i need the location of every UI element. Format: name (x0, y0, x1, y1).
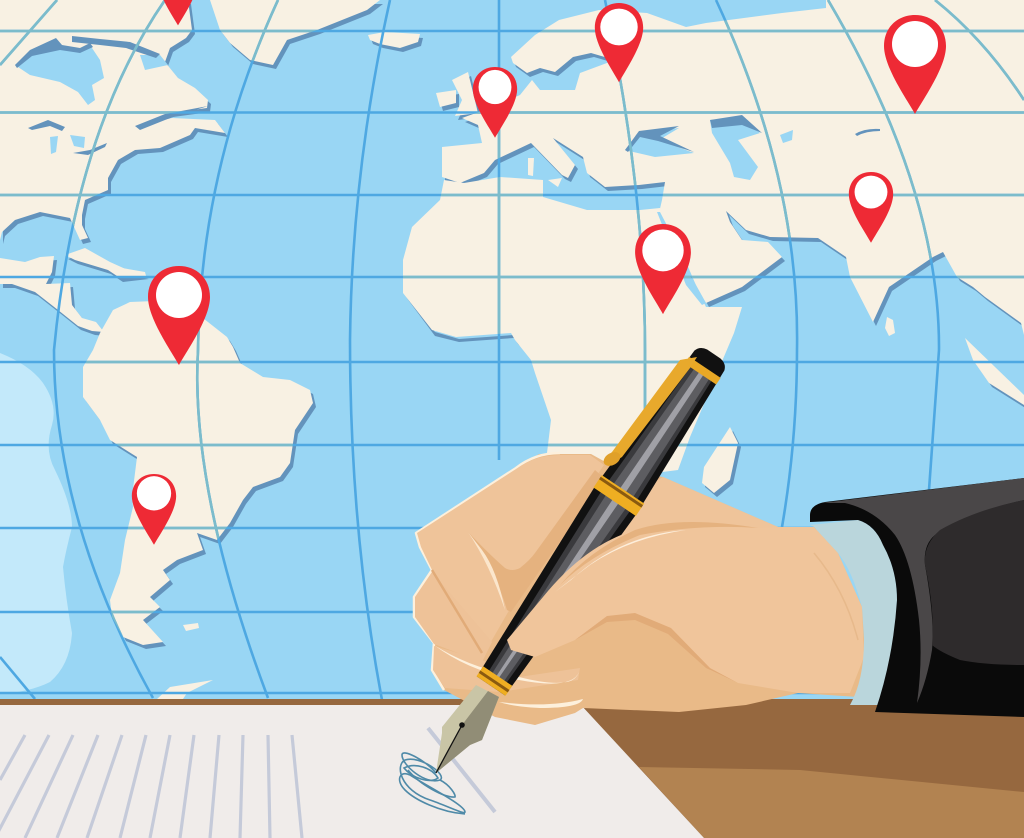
centre ring shade (599, 477, 643, 508)
Red Sea (657, 212, 706, 305)
Baffin strait shadow (72, 36, 160, 58)
pen clip (604, 357, 697, 466)
lower ring shade (479, 670, 509, 692)
desk (0, 699, 1024, 838)
nib body (436, 685, 499, 773)
signature line (428, 728, 495, 812)
Lake Erie (73, 143, 107, 155)
pin: Northern Europe (595, 3, 643, 82)
Cuba (65, 248, 146, 278)
Gulf of St Lawrence shadow (135, 106, 208, 130)
barrel base (470, 340, 735, 700)
map pins (132, 0, 946, 545)
Lake Michigan (50, 136, 58, 154)
pin: South America south (132, 474, 176, 545)
barrel mid band (486, 366, 712, 687)
hand silhouette (414, 454, 866, 725)
nib shading (436, 691, 499, 773)
Lake Baikal (855, 129, 880, 136)
finger crease shade (468, 470, 604, 612)
lower gold ring (476, 666, 512, 696)
Hispaniola (122, 268, 146, 276)
finger divider (432, 570, 482, 653)
pen nib (436, 685, 499, 773)
wrist fold (814, 553, 858, 640)
pin: East Africa (635, 224, 691, 314)
signature scribble (400, 753, 465, 814)
Africa (403, 177, 742, 480)
North America (0, 0, 225, 240)
third finger (433, 646, 580, 692)
Black Sea (625, 128, 694, 157)
pin: Western Europe (473, 67, 517, 138)
South America (83, 300, 313, 645)
Central America (0, 256, 104, 332)
light water zone (0, 353, 72, 694)
Greenland (210, 0, 380, 65)
pin: North America (159, 0, 197, 25)
finger crease highlight (468, 532, 505, 610)
Hudson Strait (140, 55, 168, 70)
back of hand (610, 477, 778, 545)
thumb and palm (507, 523, 864, 693)
thumb crease (560, 522, 758, 585)
shirt cuff (810, 520, 897, 705)
index finger (417, 455, 604, 653)
centre gold ring (593, 475, 644, 516)
clip ball (601, 449, 623, 469)
nib breather hole (459, 722, 465, 728)
top gold ring (685, 357, 721, 385)
palm shadow edge (575, 613, 738, 683)
Iceland (368, 32, 420, 48)
pin: Siberia (884, 15, 946, 114)
barrel dark grey band (481, 363, 716, 689)
cream rim light (414, 453, 560, 690)
pin: South America north (148, 266, 210, 365)
sleeve grey fold (822, 478, 1024, 703)
Caspian shadow (710, 115, 762, 133)
Sumatra and islands (965, 338, 1024, 405)
pen barrel (470, 340, 735, 700)
suit sleeve (810, 478, 1024, 717)
Falkland islands (183, 623, 199, 631)
barrel highlight (493, 371, 705, 682)
sleeve dark panel (925, 500, 1024, 665)
Antarctic peninsula (157, 680, 213, 699)
Black Sea shadow (625, 126, 694, 152)
inland seas (15, 40, 793, 305)
second finger (415, 572, 492, 662)
Sardinia (528, 158, 534, 176)
Madagascar (702, 427, 738, 493)
ruled text lines (0, 735, 302, 838)
paper sheet (0, 705, 704, 838)
desk edge and shadow (0, 699, 1024, 838)
Ireland (436, 90, 456, 107)
middle finger highlight (434, 645, 579, 684)
desk lit surface (639, 767, 1024, 838)
pin: India (849, 172, 893, 243)
Lake Huron (70, 135, 85, 148)
thumb highlight (555, 530, 686, 592)
Sicily (548, 178, 562, 187)
Lake Superior (28, 120, 65, 131)
Caspian Sea (710, 117, 760, 180)
Britain (452, 72, 478, 116)
ring finger highlight (499, 699, 583, 708)
Sri Lanka (885, 317, 895, 336)
paper (0, 705, 704, 838)
Aral Sea (780, 130, 793, 143)
fountain pen (436, 340, 735, 773)
sleeve black base (810, 478, 1024, 717)
coastal shadow strokes (15, 36, 880, 155)
nib slit (436, 725, 462, 773)
hand holding pen (414, 340, 866, 773)
Hudson Bay (15, 40, 104, 105)
land shadows (3, 4, 1024, 649)
Hudson Bay north coast (15, 38, 93, 68)
Eurasia (442, 0, 1024, 335)
